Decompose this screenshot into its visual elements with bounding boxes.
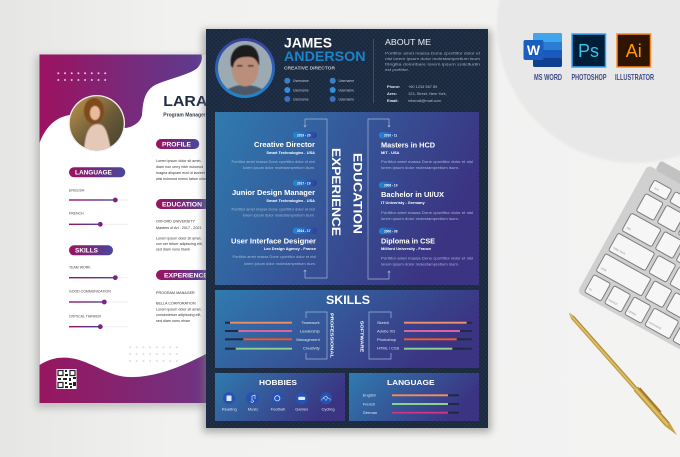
language labels <box>363 393 377 415</box>
pill: experience <box>156 270 216 280</box>
education text <box>156 220 203 252</box>
slider: critical thinker <box>69 314 128 329</box>
contact details: Email: <box>387 98 399 103</box>
keyboard: fn <box>588 287 593 292</box>
software labels: HTML / CSS <box>377 346 400 350</box>
pill: profile: PROFILE <box>162 142 191 148</box>
software skill bars <box>404 322 472 350</box>
icon: Illustrator <box>617 34 650 67</box>
social links: Username <box>338 79 354 83</box>
hobby icons <box>223 392 332 404</box>
panel: language <box>349 373 479 421</box>
degree 3: Diploma in CSE <box>381 236 435 246</box>
contact details: +60 1234 567 89 <box>408 84 437 89</box>
language labels: German <box>363 410 377 415</box>
icon: Illustrator: Ai <box>626 41 642 61</box>
education text: sed diam nonu blank <box>156 248 190 252</box>
profile text: diam non unny nibh euismod <box>156 165 203 169</box>
bottom wave <box>40 352 210 403</box>
job 2: Junior Design Manager <box>232 188 315 197</box>
about text: est porttitor. <box>385 67 409 72</box>
job title: CREATIVE DIRECTOR <box>284 66 336 70</box>
contact details: infomail@mail.com <box>408 98 441 103</box>
hobby labels: Music <box>248 406 258 411</box>
contact details <box>387 84 447 103</box>
job 2: Porttitor amet massa Done cporttitor dolor et nisl <box>232 206 315 212</box>
pill: skills: SKILLS <box>75 249 98 255</box>
slider: english: ENGLISH <box>69 188 85 192</box>
language labels: French <box>363 401 375 406</box>
pill: skills <box>69 245 113 255</box>
job 1: 2019 - 20 <box>297 134 311 138</box>
degree 1: Masters in HCD <box>381 141 436 150</box>
education text: OXFORD UNIVERSITY <box>156 220 195 224</box>
experience text: consectetuer adipiscing elit, <box>156 313 201 317</box>
job 3: Leo Design Agency - France <box>264 246 317 251</box>
keyboard: control <box>608 298 618 306</box>
keyboard: option <box>628 309 637 317</box>
hobby labels: Football <box>271 406 285 411</box>
panel: hobbies <box>215 373 345 421</box>
social links: Username <box>293 79 309 83</box>
professional labels: Creativity <box>303 346 320 350</box>
social links <box>284 78 354 102</box>
main resume <box>206 29 488 428</box>
top dots <box>57 72 106 81</box>
degree 2: IT Univeristy - Germany <box>381 200 426 205</box>
degree 2: Bachelor in UI/UX <box>381 190 444 199</box>
name: JAMES <box>284 34 332 50</box>
name: ANDERSON <box>284 48 366 64</box>
hobbies heading: HOBBIES <box>259 378 297 387</box>
profile text <box>156 159 208 181</box>
top wave <box>40 54 202 143</box>
experience text <box>156 291 202 323</box>
degree 2 <box>379 182 473 221</box>
keyboard: esc <box>654 186 660 192</box>
photo: woman <box>68 95 126 155</box>
professional skill bars <box>225 322 292 350</box>
panel: experience and education <box>215 112 479 285</box>
job 3: Porttitor amet massa Done cporttitor dolor et nisl <box>233 254 316 259</box>
contact details: Ares: <box>387 91 397 96</box>
slider: french <box>69 212 128 227</box>
photo: man <box>215 38 275 98</box>
language heading: LANGUAGE <box>387 378 434 387</box>
education text: Masters of Art . 2017 - 2021 <box>156 226 202 230</box>
name <box>284 34 366 64</box>
hobby labels <box>222 406 335 411</box>
job 2: Smart Technologies - USA <box>266 198 315 203</box>
hobby labels: Games <box>295 406 308 411</box>
about heading: ABOUT ME <box>385 37 431 47</box>
label: Photoshop: PHOTOSHOP <box>572 72 607 82</box>
experience bracket <box>304 119 327 278</box>
degree 1: Porttitor amet massa Done cporttitor dolor et nisl <box>381 159 473 164</box>
profile text: magna aliquam erat ut laoreet <box>156 171 205 175</box>
left resume shadow <box>36 56 206 408</box>
contact details: 123, Street, New York, <box>408 91 447 96</box>
profile text: wisi euismod exerci tation ullam <box>156 177 208 181</box>
panel: skills <box>215 290 479 368</box>
experience text: PROGRAM MANAGER <box>156 291 195 295</box>
icon: MS Word <box>524 33 562 67</box>
education heading: EDUCATION <box>351 153 363 234</box>
pill: experience: EXPERIENCE <box>164 273 208 279</box>
job 2: 2017 - 19 <box>297 181 311 185</box>
experience heading: EXPERIENCE <box>329 148 341 236</box>
keyboard: command <box>648 320 662 331</box>
icon: MS Word: W <box>527 42 541 58</box>
main resume shadow <box>203 30 491 432</box>
degree 2: 2008 - 10 <box>384 183 398 187</box>
software labels <box>377 320 400 350</box>
professional labels <box>296 320 321 350</box>
degree 3 <box>379 228 473 266</box>
pill: language <box>69 167 125 177</box>
about text: nisl lorem ipsum dolor molestampretium lsum <box>385 56 480 61</box>
job 1: Porttitor amet massa Done cporttitor dolor et nisl <box>232 159 315 164</box>
label: Illustrator: ILLUSTRATOR <box>615 72 654 82</box>
profile text: Lorem ipsum dolor sit amet, <box>156 159 202 163</box>
hobby labels: Cycling <box>321 406 335 411</box>
degree 1: 2010 - 11 <box>384 134 398 138</box>
hobby labels: Reading <box>222 406 237 411</box>
slider: critical thinker: CRITICAL THINKER <box>69 314 102 318</box>
job 1 <box>232 132 317 170</box>
keyboard: shift <box>600 266 607 273</box>
pill: education: EDUCATION <box>162 202 202 208</box>
slider: good communication: GOOD COMMUNICATION <box>69 289 111 293</box>
professional labels: Management <box>296 337 321 342</box>
icon: Photoshop <box>572 34 606 67</box>
job 1: Smart Technologies - USA <box>266 150 315 155</box>
keyboard <box>577 156 680 442</box>
software labels: Photoshop <box>377 337 397 342</box>
keyboard: tab <box>626 226 632 231</box>
slider: good communication <box>69 289 128 304</box>
degree 3: Millford University - France <box>381 246 432 251</box>
experience text: Lorem ipsum dolor sit amet, <box>156 308 202 312</box>
degree 1: lorem ipsum dolor molestampretium lsum. <box>381 165 459 170</box>
software labels: Sketch <box>377 320 389 325</box>
job 3: 2014 - 17 <box>297 229 311 233</box>
job 3: lorem ipsum dolor molestampretium lsum. <box>244 261 316 266</box>
skills heading: SKILLS <box>326 293 370 307</box>
contact details: Phone: <box>387 84 400 89</box>
degree 3: 2006 - 08 <box>384 229 398 233</box>
experience text: sed diam nonu ehsm <box>156 319 190 323</box>
degree 2: Porttitor amet massa Done cporttitor dolor et nisl <box>381 210 473 215</box>
degree 3: Porttitor amet massa Done cporttitor dolor et nisl <box>381 255 473 260</box>
slider: english <box>69 188 128 202</box>
degree 3: lorem ipsum dolor molestampretium lsum. <box>381 262 459 266</box>
pill: education <box>156 199 216 209</box>
pill: language: LANGUAGE <box>75 171 112 177</box>
professional heading: PROFESSIONAL <box>330 313 334 358</box>
bottom dots <box>129 346 178 362</box>
icon: Photoshop: Ps <box>578 41 599 61</box>
about text: fringilla doloribare lorem ipsum solicitudin <box>385 62 480 66</box>
job 3: User Interface Designer <box>231 236 316 246</box>
slider: french: FRENCH <box>69 212 84 216</box>
job 1: Creative Director <box>254 140 315 149</box>
education bracket <box>368 119 390 279</box>
job 2: lorem ipsum dolor molestampretium lsum. <box>243 212 315 218</box>
slider: team work <box>69 266 128 280</box>
social links: Username <box>338 97 354 101</box>
pill: profile <box>156 139 199 149</box>
social links: Username <box>293 88 309 92</box>
QR code <box>56 369 76 389</box>
about text: Porttitor amet massa Done cporttitor dolor et <box>385 50 481 56</box>
language labels: English <box>363 393 376 398</box>
gold pen <box>567 310 680 437</box>
about text <box>385 50 481 72</box>
education text: con ser tetuer adipiscing elit, <box>156 242 203 246</box>
job 2 <box>232 180 317 218</box>
experience text: BELLA CORPORATION <box>156 302 196 306</box>
slider: team work: TEAM WORK <box>69 266 91 270</box>
language bars <box>392 394 459 414</box>
software labels: Adobe XD <box>377 328 395 334</box>
left resume <box>40 54 216 403</box>
social links: Username <box>338 88 354 92</box>
degree 1 <box>379 132 473 170</box>
name: Lara: LARA <box>163 93 207 110</box>
professional labels: Teamwork <box>301 320 320 325</box>
job 1: lorem ipsum dolor molestampretium lsum. <box>243 165 315 170</box>
software heading: SOFTWARE <box>360 321 364 352</box>
label: MS Word: MS WORD <box>534 72 562 82</box>
degree 1: MIT - USA <box>381 150 400 155</box>
role: Program Manager <box>163 112 206 118</box>
keyboard: caps lock <box>613 246 626 256</box>
social links: Username <box>293 97 309 101</box>
education text: Lorem ipsum dolor sit amet, <box>156 236 202 240</box>
job 3 <box>231 228 317 266</box>
degree 2: lorem ipsum dolor molestampretium lsum. <box>381 216 459 221</box>
professional labels: Leadership <box>300 328 320 334</box>
